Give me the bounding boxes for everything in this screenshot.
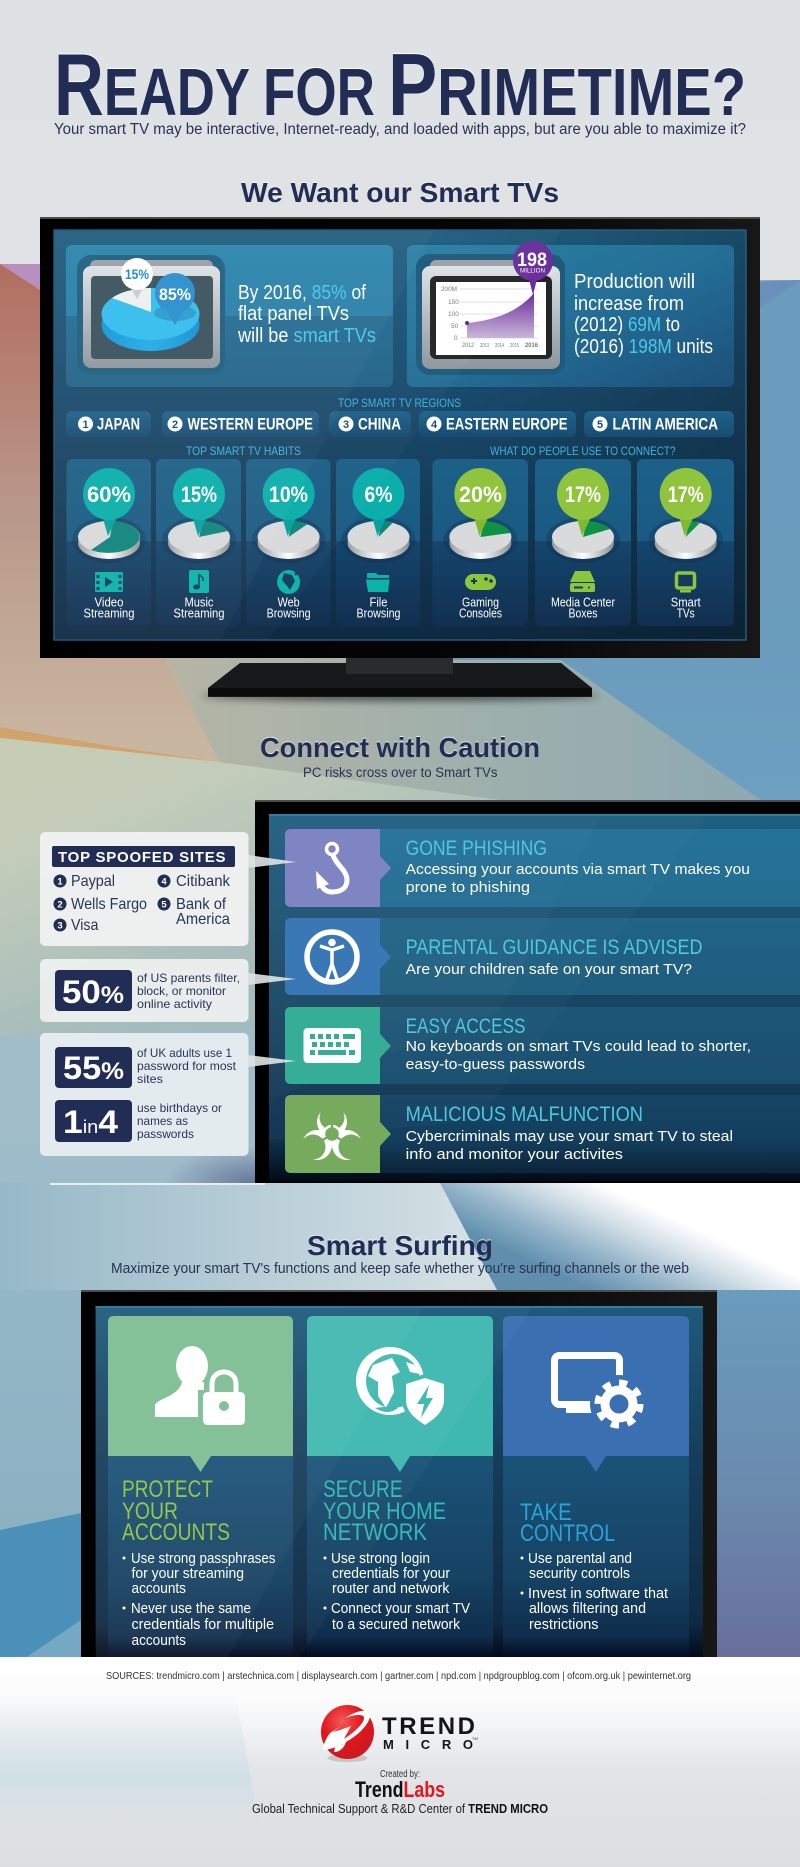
card: file browsing 6 percent: File — [370, 596, 388, 610]
text: production: (2016) 198M units — [574, 336, 713, 358]
row: malicious malfunction: info and monitor your activites — [406, 1146, 623, 1163]
logo: TrendLabs: TrendLabs — [355, 1777, 445, 1802]
regions list: 5 — [597, 419, 603, 431]
row: easy access: EASY ACCESS — [406, 1015, 526, 1038]
stat: 55 percent: 55% — [63, 1050, 124, 1086]
text: by 2016: will be smart TVs — [237, 325, 376, 347]
arrow: to easy access — [248, 1055, 296, 1067]
column: protect your accounts: PROTECT — [122, 1476, 213, 1503]
subheading: PC risks: PC risks cross over to Smart TVs — [303, 764, 498, 780]
arrow: to parental guidance — [248, 973, 296, 985]
card: web browsing 10 percent: 10% — [269, 482, 308, 507]
stat: 1 in 4: 1in4 — [63, 1104, 118, 1140]
card: 50 percent of US parents: of US parents filter, — [137, 971, 240, 985]
list: protect tips: Never use the same — [131, 1601, 251, 1617]
label: 198 million: MILLION — [520, 268, 545, 274]
list: spoofed sites: 2 — [57, 900, 63, 910]
icon: TV with line chart: 2014 — [495, 343, 504, 349]
list: secure tips — [324, 1551, 470, 1633]
card: 50 percent of US parents — [40, 959, 296, 1022]
TV frame — [40, 217, 760, 658]
title: PRIMETIME? — [388, 35, 746, 134]
list: spoofed sites: Visa — [71, 917, 99, 934]
list: spoofed sites: Wells Fargo — [71, 896, 147, 913]
list: control tips: Invest in software that — [528, 1586, 668, 1602]
created by: Created by: — [380, 1769, 420, 1780]
icon: media box — [570, 571, 595, 592]
icon: TV with line chart: 2015 — [510, 343, 519, 349]
icon: TV with line chart: 100 — [448, 311, 459, 318]
card: 50 percent of US parents: 50% — [62, 974, 124, 1010]
icon: globe and shield — [356, 1347, 448, 1428]
stat: 55 percent: password for most — [137, 1059, 237, 1073]
card: music streaming 15 percent — [156, 459, 241, 626]
icon: TV with line chart: 2016 — [525, 342, 538, 349]
icon: folder — [366, 573, 390, 592]
stat: 55 percent — [55, 1046, 237, 1088]
logo: Trend Micro: TM — [472, 1736, 478, 1741]
list: spoofed sites: America — [176, 911, 230, 928]
icon: music note — [189, 570, 209, 593]
list: secure tips: credentials for your — [332, 1566, 450, 1582]
card: gaming consoles 20 percent: Gaming — [462, 596, 499, 610]
card: file browsing 6 percent: Browsing — [356, 606, 401, 620]
column: secure your home network: NETWORK — [323, 1519, 427, 1546]
column: take control — [503, 1316, 689, 1657]
row: gone phishing: prone to phishing — [406, 879, 530, 896]
card: media center boxes 17 percent: Media Center — [551, 596, 615, 610]
column: take control: TAKE — [520, 1499, 572, 1526]
row: easy access: easy-to-guess passwords — [406, 1056, 585, 1073]
row: parental guidance: Are your children safe on your smart TV? — [406, 961, 692, 978]
stat: 1 in 4: passwords — [137, 1127, 194, 1141]
logo: Trend Micro: MICRO — [383, 1737, 473, 1752]
list: control tips — [520, 1551, 668, 1633]
stat: 1 in 4: names as — [137, 1114, 188, 1128]
card: video streaming 60 percent — [66, 459, 151, 626]
title: FOR — [263, 55, 375, 130]
icon: game controller — [465, 574, 496, 590]
card: web browsing 10 percent: Web — [278, 596, 300, 610]
label: 85 percent: 85% — [159, 285, 191, 304]
regions list: 3 — [343, 419, 349, 431]
card: video streaming 60 percent: Video — [94, 596, 124, 610]
list: control tips: restrictions — [529, 1617, 598, 1633]
card: gaming consoles 20 percent: Consoles — [459, 606, 502, 620]
panel: second TV — [255, 800, 800, 1183]
row: malicious malfunction — [285, 1095, 800, 1173]
list: protect tips: accounts — [132, 1633, 186, 1649]
regions list: EASTERN EUROPE — [446, 416, 568, 434]
list: protect tips — [122, 1551, 276, 1649]
card: web browsing 10 percent: Browsing — [267, 606, 311, 620]
title — [54, 35, 746, 134]
label: 15 percent: 15% — [125, 266, 149, 282]
list: spoofed sites: 3 — [57, 920, 63, 932]
column: protect your accounts — [108, 1316, 293, 1657]
card: media center boxes 17 percent: Boxes — [568, 606, 598, 620]
row: gone phishing: Accessing your accounts via smart TV makes you — [406, 861, 750, 878]
card: smart TVs 17 percent: TVs — [677, 606, 695, 620]
regions list: WESTERN EUROPE — [188, 416, 313, 434]
regions list: LATIN AMERICA — [612, 416, 718, 434]
subtitle: Your smart TV may be interactive, Internet-ready, and loaded with apps, but are you able to maximize it? — [54, 121, 746, 138]
icon: small TV — [676, 573, 694, 592]
logo: Trend Micro: TREND — [382, 1713, 475, 1740]
column: protect your accounts: ACCOUNTS — [122, 1519, 230, 1546]
card: gaming consoles 20 percent: 20% — [459, 482, 502, 507]
text: by 2016 — [237, 282, 376, 347]
list: spoofed sites: 4 — [161, 876, 167, 888]
card: music streaming 15 percent: 15% — [181, 482, 217, 507]
tagline: Global Technical Support & R&D Center of TREND MICRO — [252, 1801, 548, 1816]
icon: accessibility person — [307, 932, 357, 982]
text: production — [574, 271, 713, 358]
heading: top smart TV regions: TOP SMART TV REGIONS — [338, 396, 461, 410]
icon: film strip — [95, 572, 123, 592]
list: secure tips: to a secured network — [332, 1617, 461, 1633]
sources: SOURCES: trendmicro.com | arstechnica.com | displaysearch.com | gartner.com | npd.com | npdgroupblog.com | ofcom.org.uk | pewinternet.org — [106, 1670, 691, 1682]
list: spoofed sites: Citibank — [176, 873, 231, 890]
text: by 2016: flat panel TVs — [238, 303, 349, 325]
TV stand — [202, 658, 598, 701]
list: protect tips: Use strong passphrases — [131, 1551, 276, 1567]
icon: person and lock — [155, 1346, 245, 1425]
column: secure your home network: YOUR HOME — [323, 1498, 446, 1525]
regions list: CHINA — [358, 416, 401, 434]
column: secure your home network: SECURE — [323, 1476, 403, 1503]
card: password stats — [40, 1033, 296, 1156]
icon: TV with line chart — [416, 241, 565, 375]
arrow: to phishing — [248, 855, 296, 868]
heading: We Want our Smart TVs: We Want our Smart TVs — [241, 177, 559, 208]
icon: TV with line chart: 50 — [451, 323, 459, 330]
heading: Smart Surfing: Smart Surfing — [307, 1230, 493, 1261]
screen glare — [96, 1308, 532, 1657]
row: gone phishing — [285, 829, 800, 907]
card: media center boxes 17 percent — [535, 459, 631, 626]
card: file browsing 6 percent — [336, 459, 420, 626]
icon: TV with pie chart — [77, 255, 225, 375]
list: control tips: Use parental and — [528, 1551, 632, 1567]
card: video streaming 60 percent: 60% — [87, 482, 131, 507]
list: spoofed sites: 1 — [57, 876, 63, 888]
subheading: maximize: Maximize your smart TV's functions and keep safe whether you're surfing channels or the web — [111, 1261, 689, 1277]
list: control tips: allows filtering and — [529, 1601, 646, 1617]
heading: top smart TV habits: TOP SMART TV HABITS — [186, 444, 301, 458]
text: by 2016: By 2016, 85% of — [238, 282, 366, 304]
icon: TV with line chart: 0 — [454, 335, 458, 342]
list: spoofed sites: Bank of — [176, 896, 227, 913]
icon: TV with line chart: 2013 — [480, 343, 489, 349]
text: production: (2012) 69M to — [574, 314, 680, 336]
icon: TV with line chart: 150 — [448, 299, 459, 306]
icon: biohazard — [300, 1105, 364, 1160]
card: file browsing 6 percent: 6% — [364, 482, 392, 507]
row: parental guidance: PARENTAL GUIDANCE IS ADVISED — [406, 936, 702, 959]
row: easy access: No keyboards on smart TVs could lead to shorter, — [406, 1038, 751, 1055]
stat: 1 in 4 — [55, 1100, 222, 1142]
row: gone phishing: GONE PHISHING — [406, 837, 547, 860]
regions list — [66, 411, 734, 437]
row: easy access — [285, 1007, 800, 1084]
icon: TV with line chart: 200M — [441, 286, 457, 293]
column: secure your home network — [307, 1316, 493, 1657]
screen glare — [55, 231, 561, 639]
card: web browsing 10 percent — [246, 459, 330, 626]
list: spoofed sites: 5 — [161, 900, 167, 910]
list: protect tips: credentials for multiple — [132, 1617, 274, 1633]
panel: first TV — [40, 217, 760, 701]
panel: third TV — [81, 1290, 717, 1657]
icon: TV with line chart: 2012 — [462, 342, 474, 349]
list: protect tips: accounts — [132, 1581, 186, 1597]
column: take control: CONTROL — [520, 1520, 615, 1547]
regions list: 1 — [82, 419, 89, 431]
list: spoofed sites: Paypal — [71, 873, 115, 890]
list: control tips: security controls — [529, 1566, 630, 1582]
panel: 85 percent smart TVs — [66, 245, 393, 387]
icon: hook — [316, 844, 347, 892]
title: READY — [54, 35, 250, 134]
row: malicious malfunction: Cybercriminals may use your smart TV to steal — [406, 1128, 733, 1145]
card: smart TVs 17 percent: Smart — [671, 596, 701, 610]
text: production: increase from — [574, 293, 684, 315]
row: parental guidance — [285, 918, 800, 995]
card: 50 percent of US parents: block, or monitor — [137, 984, 226, 998]
list: secure tips: router and network — [332, 1581, 450, 1597]
card: smart TVs 17 percent — [637, 459, 734, 626]
label: 198 million: 198 — [517, 250, 547, 271]
card: media center boxes 17 percent: 17% — [565, 482, 601, 507]
logo: Trend Micro — [321, 1705, 478, 1762]
TV screen — [54, 230, 746, 640]
icon: monitor and gear — [554, 1356, 648, 1433]
card: music streaming 15 percent: Streaming — [174, 606, 225, 620]
card: gaming consoles 20 percent — [432, 459, 528, 626]
card: smart TVs 17 percent: 17% — [668, 482, 704, 507]
stat: 55 percent: of UK adults use 1 — [137, 1046, 232, 1060]
stat: 55 percent: sites — [137, 1072, 163, 1086]
column: protect your accounts: YOUR — [122, 1498, 178, 1525]
card: top spoofed sites — [40, 832, 296, 946]
icon: keyboard — [304, 1028, 361, 1063]
regions list: 2 — [172, 419, 178, 431]
row: malicious malfunction: MALICIOUS MALFUNCTION — [406, 1103, 643, 1126]
card: music streaming 15 percent: Music — [184, 596, 214, 610]
regions list: 4 — [431, 419, 438, 431]
banner: top spoofed sites: TOP SPOOFED SITES — [58, 849, 226, 866]
list: secure tips: Use strong login — [331, 1551, 430, 1567]
list: protect tips: for your streaming — [132, 1566, 244, 1582]
stat: 1 in 4: use birthdays or — [137, 1101, 222, 1115]
list: spoofed sites — [54, 873, 231, 934]
heading: what do people use to connect: WHAT DO PEOPLE USE TO CONNECT? — [490, 444, 676, 458]
text: production: Production will — [574, 271, 695, 293]
icon: globe — [277, 570, 300, 594]
panel: production — [407, 241, 734, 387]
card: 50 percent of US parents: online activity — [137, 997, 212, 1011]
regions list: JAPAN — [97, 416, 140, 434]
list: secure tips: Connect your smart TV — [331, 1601, 470, 1617]
heading: Connect with Caution: Connect with Caution — [260, 732, 540, 763]
card: video streaming 60 percent: Streaming — [84, 606, 135, 620]
